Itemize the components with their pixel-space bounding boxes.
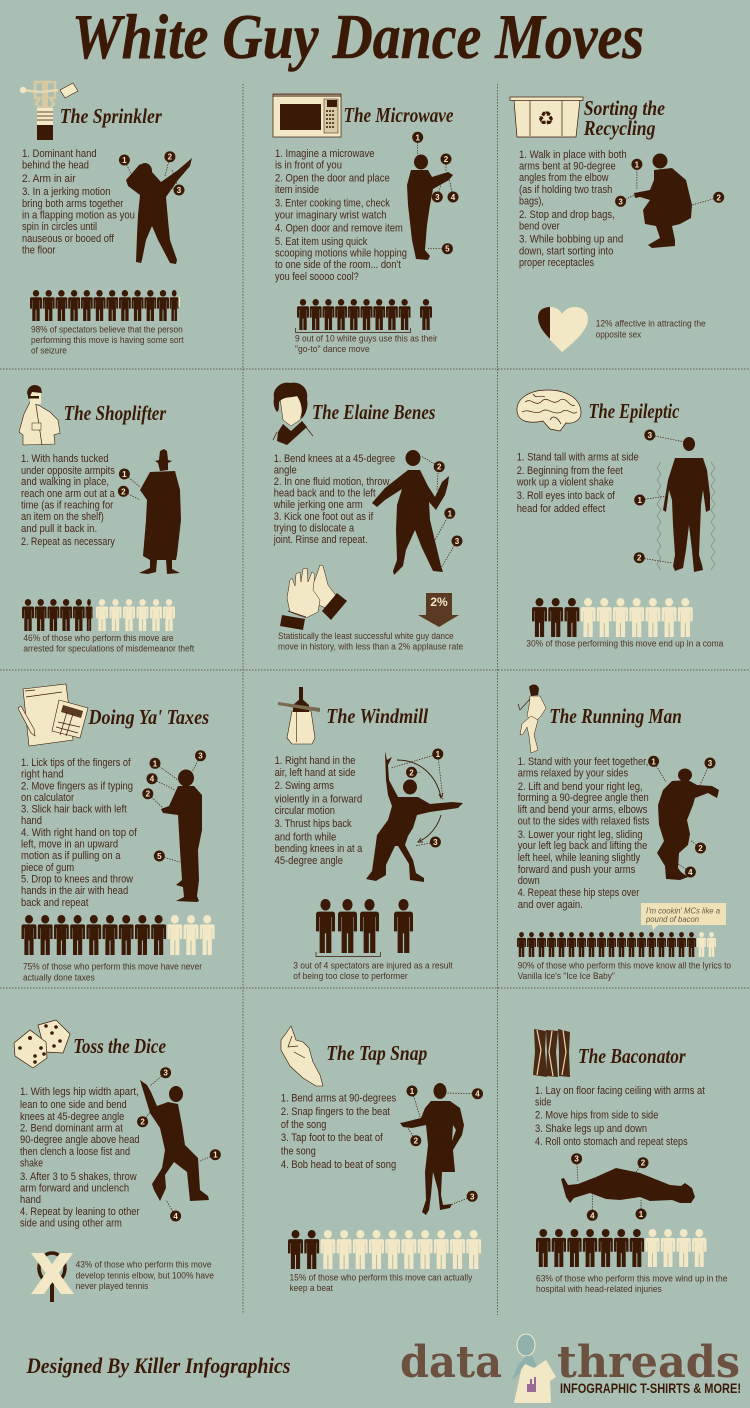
statistic: Vanilla Ice's "Ice Ice Baby" (518, 971, 615, 982)
instructions: motion as if pulling on a (21, 850, 121, 862)
callouts: 3 (163, 1069, 168, 1078)
instructions: of the song (281, 1119, 326, 1131)
callouts: 2 (146, 790, 151, 799)
heading: The Sprinkler (60, 104, 162, 128)
instructions: forward and push your arms (518, 864, 635, 876)
icon: sprinkler (20, 82, 78, 140)
statistic: 30% of those performing this move end up in a coma (526, 638, 724, 649)
instructions: 1. Lick tips of the fingers of (21, 757, 131, 769)
statistic (536, 1273, 727, 1295)
instructions (281, 1092, 396, 1171)
instructions: scooping motions while hopping (275, 248, 407, 260)
instructions: left, move in an upward (21, 838, 118, 850)
callouts: 2 (716, 193, 721, 202)
instructions: the song (281, 1146, 316, 1158)
callouts: 2 (444, 155, 449, 164)
icon: 2% down arrow (418, 593, 459, 627)
instructions: angles from the elbow (519, 172, 609, 184)
instructions: arms bent at 90-degree (519, 160, 616, 172)
callouts: 1 (639, 1210, 644, 1219)
statistic: "go-to" dance move (295, 344, 370, 355)
heading: Doing Ya' Taxes (88, 705, 209, 729)
instructions (516, 452, 639, 515)
instructions: trying to dislocate a (274, 522, 354, 534)
instructions: 90-degree angle above head (20, 1134, 140, 1146)
statistic: develop tennis elbow, but 100% have (76, 1270, 214, 1281)
speech bubble: I'm cookin' MCs like a (646, 906, 720, 916)
icon: windmill (278, 687, 320, 744)
figure: man lying on floor (561, 1168, 695, 1203)
instructions: 4. Bob head to beat of song (281, 1159, 396, 1171)
panel: The Baconator (533, 1029, 727, 1295)
instructions: 2. Snap fingers to the beat (281, 1106, 390, 1118)
instructions: 2. In one fluid motion, throw (274, 476, 390, 488)
instructions: arm forward and unclench (20, 1182, 129, 1194)
instructions: work up a violent shake (516, 476, 614, 488)
icon: runner (518, 685, 546, 753)
statistic (23, 633, 194, 655)
pictogram: 15% (288, 1230, 481, 1269)
callouts (142, 750, 206, 862)
instructions: 2. Move hips from side to side (535, 1110, 658, 1122)
instructions: 2. Arm in air (22, 173, 76, 185)
heading: The Windmill (326, 704, 428, 728)
icon: recycling bin: ♻ (537, 108, 555, 130)
callouts: 1 (436, 750, 441, 759)
instructions: item inside (275, 184, 319, 196)
statistic: performing this move is having some sort (31, 335, 184, 346)
instructions: 1. Bend knees at a 45-degree (274, 453, 395, 465)
instructions: right hand (21, 768, 64, 780)
figure: man in trench coat (139, 449, 181, 574)
instructions: 2. Bend dominant arm at (20, 1122, 123, 1134)
speech bubble (641, 903, 726, 930)
panel: The Tap Snap (281, 1026, 483, 1294)
heading: The Running Man (549, 704, 682, 728)
callouts: 5 (157, 852, 162, 861)
instructions: 3. After 3 to 5 shakes, throw (20, 1171, 137, 1183)
speech bubble: pound of bacon (645, 914, 699, 924)
heading: Toss the Dice (73, 1034, 166, 1058)
instructions: (as if holding two trash (519, 184, 612, 196)
instructions: lean to one side and bend (20, 1099, 127, 1111)
instructions: 3. Kick one foot out as if (274, 511, 373, 523)
callouts: 2 (140, 1118, 145, 1127)
panel: Doing Ya' Taxes (18, 684, 215, 983)
panel: The Running Man (517, 685, 731, 982)
instructions: air, left hand at side (275, 767, 356, 779)
heading: The Epileptic (588, 399, 680, 423)
callouts: 1 (213, 1151, 218, 1160)
callouts: 3 (648, 431, 653, 440)
statistic: opposite sex (596, 330, 641, 341)
statistic: move in history, with less than a 2% applause rate (278, 642, 463, 653)
instructions: joint. Rinse and repeat. (273, 534, 368, 546)
heading: The Tap Snap (326, 1041, 427, 1065)
pictogram: 3 of 4 (316, 899, 413, 956)
instructions: 1. With legs hip width apart, (20, 1086, 139, 1098)
statistic: of being too close to performer (293, 971, 408, 982)
figure: tap snap dancer (400, 1083, 464, 1215)
instructions: bend over (519, 220, 560, 232)
instructions: knees at 45-degree angle (20, 1111, 124, 1123)
callouts: 2 (637, 554, 642, 563)
instructions: 1. Stand with your feet together, (518, 756, 648, 768)
callouts: 3 (433, 838, 438, 847)
instructions: 5. Drop to knees and throw (21, 874, 133, 886)
instructions: 2. Stop and drop bags, (519, 209, 615, 221)
statistic: Statistically the least successful white guy dance (278, 631, 454, 642)
instructions: then clench a loose fist and (20, 1146, 130, 1158)
statistic: 63% of those who perform this move wind up in the (536, 1273, 727, 1284)
instructions (275, 755, 362, 867)
statistic: 46% of those who perform this move are (23, 633, 174, 644)
instructions: you feel soooo cool? (275, 271, 359, 283)
icon: dice (14, 1020, 70, 1068)
instructions: angle (274, 464, 297, 476)
instructions: 1. Right hand in the (275, 755, 356, 767)
instructions: 4. With right hand on top of (21, 827, 137, 839)
callouts: 1 (651, 757, 656, 766)
instructions: 1. Lay on floor facing ceiling with arms at (535, 1085, 705, 1097)
panel: The Sprinkler (20, 82, 192, 357)
instructions: in a flapping motion as you (22, 210, 135, 222)
callouts: 3 (574, 1155, 579, 1164)
callouts: 4 (173, 1212, 178, 1221)
callouts: 1 (415, 133, 420, 142)
instructions: down, start sorting into (519, 246, 613, 258)
heading: The Microwave (344, 103, 454, 127)
callouts (137, 1067, 221, 1222)
instructions: 4. Repeat these hip steps over (518, 887, 640, 899)
callouts: 1 (410, 1087, 415, 1096)
callouts (648, 756, 716, 878)
icon: person in t-shirt (512, 1334, 556, 1403)
instructions: while jerking one arm (273, 499, 363, 511)
callouts: 4 (688, 868, 693, 877)
panel: The Shoplifter (19, 385, 194, 655)
instructions: 4. Open door and remove item (275, 222, 403, 234)
instructions: and pull it back in. (21, 523, 97, 535)
instructions: on calculator (21, 792, 75, 804)
instructions: under opposite armpits (21, 465, 115, 477)
callouts: 1 (448, 509, 453, 518)
callouts: 3 (470, 1192, 475, 1201)
statistic (76, 1260, 214, 1292)
instructions (21, 453, 115, 548)
panel: Sorting the Recycling (510, 96, 724, 352)
statistic: 9 out of 10 white guys use this as their (295, 333, 438, 344)
instructions: side (535, 1096, 551, 1108)
callouts: 2 (641, 1159, 646, 1168)
callouts: 3 (708, 759, 713, 768)
instructions: circular motion (275, 805, 335, 817)
instructions (275, 148, 407, 283)
instructions: 4. Repeat by leaning to other (20, 1206, 140, 1218)
statistic (278, 631, 463, 653)
statistic: 12% affective in attracting the (596, 319, 706, 330)
icon: man in coat and glasses (19, 385, 60, 445)
instructions (22, 148, 135, 256)
panel: The Windmill (275, 687, 463, 982)
instructions: 3. While bobbing up and (519, 234, 623, 246)
panel: The Microwave (273, 94, 458, 355)
logo text: threads: threads (557, 1337, 740, 1388)
instructions: spin in circles until (22, 221, 97, 233)
figure: man doing taxes (161, 770, 202, 902)
instructions: 3. Thrust hips back (275, 818, 352, 830)
icon: microwave (273, 94, 341, 137)
instructions: 1. Stand tall with arms at side (517, 452, 639, 464)
instructions: bring both arms together (22, 198, 124, 210)
statistic: never played tennis (76, 1281, 148, 1292)
instructions: bending knees in at a (275, 843, 362, 855)
instructions: 3. Shake legs up and down (535, 1123, 647, 1135)
statistic: actually done taxes (23, 972, 95, 983)
instructions: 2. Swing arms (275, 780, 334, 792)
heading: The Shoplifter (64, 401, 167, 425)
statistic: 15% of those who perform this move can actually (290, 1272, 472, 1283)
instructions: left heel, while leaning slightly (518, 852, 641, 864)
callouts: 5 (445, 245, 450, 254)
callouts: 3 (177, 186, 182, 195)
instructions: your left leg back and lifting the (518, 840, 647, 852)
callouts: 1 (153, 759, 158, 768)
instructions: 2. Lift and bend your right leg, (518, 781, 643, 793)
statistic (293, 960, 453, 982)
figure: windmill dancer (366, 751, 463, 882)
arrows (397, 760, 443, 842)
instructions: behind the head (22, 160, 89, 172)
instructions: down (518, 875, 540, 887)
panel: The Elaine Benes (273, 383, 463, 653)
statistic: 43% of those who perform this move (76, 1260, 211, 1271)
callouts: 2 (437, 463, 442, 472)
icon: Elaine portrait (273, 383, 313, 445)
instructions: back and repeat (21, 897, 89, 909)
callouts (571, 1153, 648, 1221)
instructions: bags), (519, 196, 544, 208)
statistic (290, 1272, 472, 1294)
callouts (391, 748, 443, 848)
instructions (518, 756, 649, 911)
instructions: piece of gum (21, 862, 74, 874)
statistic: hospital with head-related injuries (536, 1284, 662, 1295)
statistic: keep a beat (290, 1283, 333, 1294)
instructions: 1. With hands tucked (21, 453, 109, 465)
callouts: 3 (435, 193, 440, 202)
callouts: 1 (637, 496, 642, 505)
callouts: 4 (475, 1090, 480, 1099)
footer credit: Designed By Killer Infographics (26, 1353, 290, 1378)
instructions: hand (20, 1194, 41, 1206)
heading: Sorting the (584, 96, 665, 120)
callouts: 1 (122, 470, 127, 479)
instructions: 4. Roll onto stomach and repeat steps (535, 1136, 688, 1148)
title: White Guy Dance Moves (72, 1, 644, 72)
instructions: 1. Walk in place with both (519, 149, 627, 161)
instructions: 3. In a jerking motion (22, 186, 111, 198)
instructions: 3. Roll eyes into back of (517, 490, 615, 502)
icon: tax papers and calculator (18, 684, 88, 746)
pictogram: 9 of 10 (296, 299, 432, 332)
callouts (118, 468, 140, 500)
panel: The Epileptic (516, 390, 724, 649)
statistic: of seizure (31, 346, 67, 357)
instructions: side and using other arm (20, 1218, 122, 1230)
figure: Elaine dancer (372, 450, 449, 575)
instructions: forming a 90-degree angle then (518, 792, 649, 804)
instructions (20, 1086, 140, 1230)
callouts (412, 132, 458, 254)
instructions: shake (20, 1158, 43, 1170)
instructions: 2. Move fingers as if typing (21, 780, 133, 792)
callouts (406, 1086, 483, 1205)
instructions: and forth while (275, 832, 336, 844)
instructions (535, 1085, 705, 1148)
instructions: lift and bend your arms, elbows (518, 804, 647, 816)
instructions: 3. Tap foot to the beat of (281, 1132, 383, 1144)
callouts (421, 456, 462, 568)
instructions: proper receptacles (519, 257, 594, 269)
pictogram: 63% (536, 1229, 706, 1267)
statistic (23, 962, 203, 983)
instructions: an item on the shelf) (21, 511, 104, 523)
instructions: arms relaxed by your sides (518, 768, 628, 780)
figure: sprinkler dancer (126, 158, 192, 264)
callouts: 4 (451, 193, 456, 202)
callouts: 2 (168, 153, 173, 162)
statistic (31, 324, 184, 357)
icon: crossed-out tennis racket (31, 1253, 74, 1302)
instructions: 3. Slick hair back with left (21, 804, 127, 816)
instructions: hands in the air with head (21, 885, 128, 897)
heading: Recycling (583, 116, 656, 140)
callouts: 2 (121, 487, 126, 496)
instructions: 1. Imagine a microwave (275, 148, 375, 160)
callouts: 3 (618, 197, 623, 206)
instructions: head back and to the left (274, 488, 376, 500)
heading: The Elaine Benes (312, 400, 435, 424)
icon: brain (517, 390, 581, 431)
statistic (518, 960, 731, 982)
instructions: 1. Dominant hand (22, 148, 97, 160)
instructions: 2. Repeat as necessary (21, 536, 115, 548)
icon: heart 12% (538, 307, 588, 352)
instructions: 45-degree angle (275, 855, 343, 867)
statistic: arrested for speculations of misdemeanor theft (23, 644, 194, 655)
icon: snapping hand (281, 1026, 323, 1086)
instructions: out to the sides with relaxed fists (518, 816, 649, 828)
statistic (596, 319, 706, 341)
heading: The Baconator (578, 1044, 686, 1068)
callouts: 1 (635, 160, 640, 169)
statistic: 98% of spectators believe that the person (31, 324, 183, 335)
shake lines (657, 462, 715, 570)
instructions: and over again. (518, 899, 583, 911)
instructions (21, 757, 137, 909)
instructions: nauseous or booed off (22, 233, 114, 245)
callouts: 2 (698, 844, 703, 853)
statistic: 75% of those who perform this move have never (23, 962, 203, 973)
instructions: your imaginary wrist watch (275, 210, 387, 222)
instructions: to one side of the room... don't (275, 259, 401, 271)
figure: dice dancer (140, 1080, 209, 1201)
figure: running man dancer (657, 768, 719, 880)
callouts: 3 (198, 752, 203, 761)
callouts: 2 (409, 768, 414, 777)
instructions: 1. Bend arms at 90-degrees (281, 1092, 396, 1104)
icon: 2% down arrow: 2% (430, 595, 448, 609)
instructions: hand (21, 815, 42, 827)
instructions: and walking in place, (21, 476, 109, 488)
instructions: 2. Open the door and place (275, 172, 390, 184)
icon: clapping hands (280, 565, 347, 630)
callouts: 3 (455, 537, 460, 546)
instructions: head for added effect (517, 503, 605, 515)
figure: microwave dancer (407, 154, 453, 260)
instructions: 3. Enter cooking time, check (275, 198, 390, 210)
panel: Toss the Dice (14, 1020, 221, 1302)
heading (583, 96, 665, 140)
instructions (519, 149, 627, 269)
icon: recycling bin (510, 97, 583, 137)
instructions: violently in a forward (275, 794, 362, 806)
pictogram: 30% (532, 598, 693, 637)
logo text: data: data (400, 1337, 502, 1388)
instructions: 3. Lower your right leg, sliding (518, 829, 643, 841)
instructions (273, 453, 395, 546)
instructions: is in front of you (275, 160, 342, 172)
instructions: the floor (22, 244, 56, 256)
callouts: 2 (414, 1137, 419, 1146)
callouts: 4 (150, 775, 155, 784)
icon: bacon strips (533, 1029, 570, 1077)
callouts (119, 151, 184, 196)
instructions: 5. Eat item using quick (275, 236, 368, 248)
instructions: time (as if reaching for (21, 500, 114, 512)
instructions: 2. Beginning from the feet (517, 465, 623, 477)
pictogram: 75% (22, 915, 215, 955)
figure: standing man (663, 437, 710, 572)
statistic: 3 out of 4 spectators are injured as a result (293, 960, 453, 971)
figure: squatting dancer (634, 154, 692, 248)
instructions: reach one arm out at a (21, 488, 115, 500)
callouts: 1 (122, 156, 127, 165)
pictogram: 46% (22, 599, 175, 631)
statistic (295, 333, 438, 355)
callouts (634, 430, 685, 563)
callouts (615, 159, 724, 207)
pictogram: 98% (30, 290, 180, 321)
pictogram: 90% (517, 932, 716, 957)
data threads logo (400, 1334, 741, 1403)
callouts: 4 (590, 1211, 595, 1220)
